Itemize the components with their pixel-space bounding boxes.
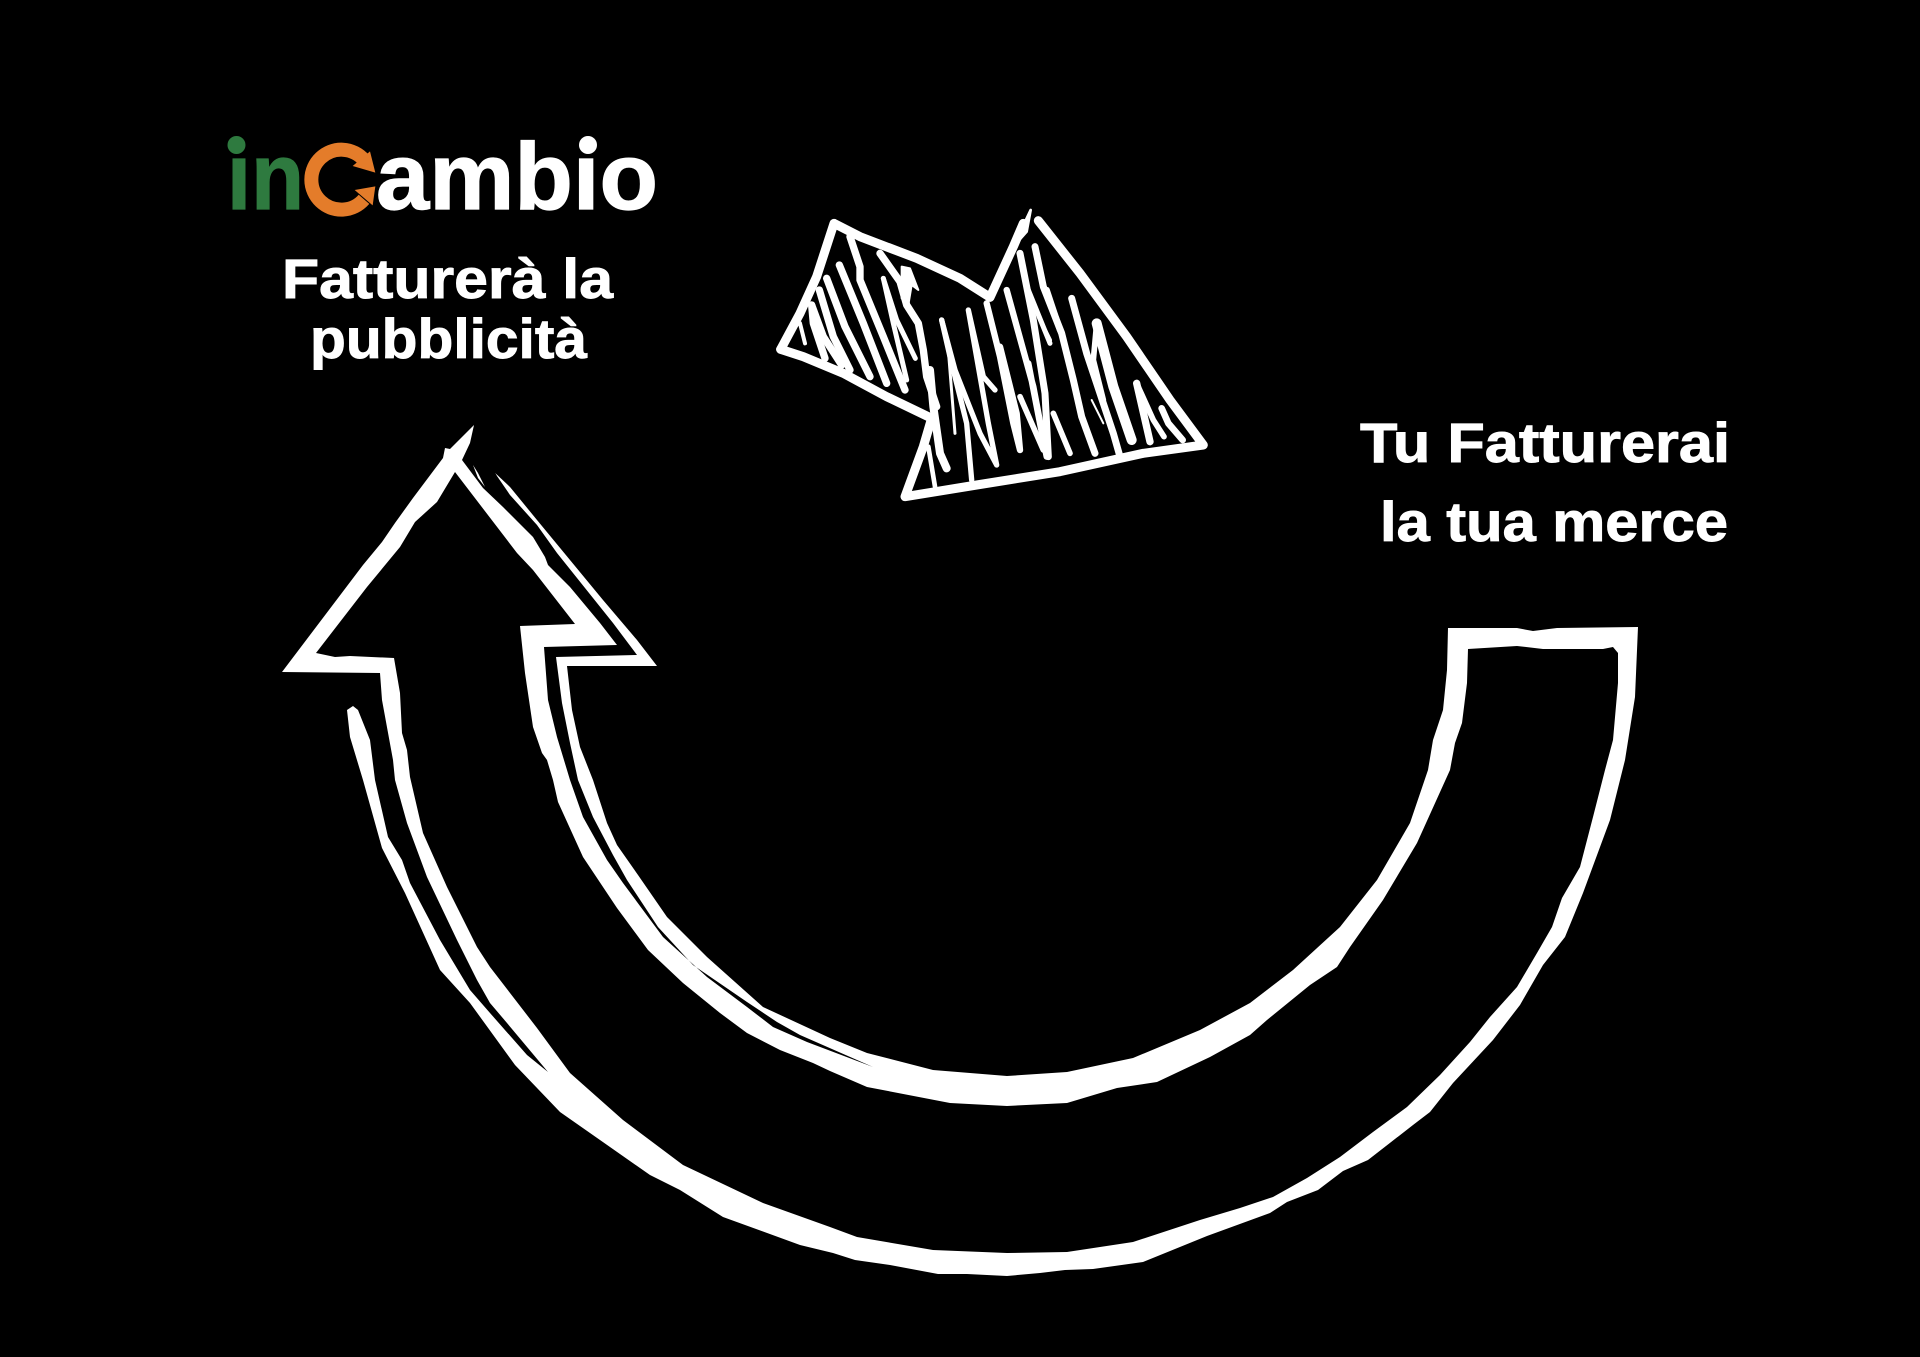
heading: Fatturerà la pubblicità: Fatturerà la [282, 247, 614, 310]
arrow black interior [316, 472, 1618, 1253]
icon: orange circular arrows letter C [311, 150, 375, 210]
hatching: left section [800, 237, 937, 407]
arrow inner slit [462, 460, 873, 1067]
heading: Fatturerà la pubblicità [282, 247, 614, 370]
logo word part: in: in [227, 124, 304, 230]
arrow head sliver [473, 465, 485, 487]
icon: scribbled arrow pointing right-down [781, 210, 1203, 497]
heading: Tu Fatturerai la tua merce: Tu Fatturerai [1360, 411, 1730, 474]
big curved arrow [282, 425, 1638, 1276]
arrow white silhouette [282, 425, 1638, 1276]
hatching: right section [1020, 247, 1183, 457]
logo word part: ambio: ambio [376, 124, 658, 230]
heading: Tu Fatturerai la tua merce [1360, 411, 1730, 553]
hatching: central section [928, 290, 1060, 487]
heading: Fatturerà la pubblicità: pubblicità [310, 307, 588, 370]
heading: Tu Fatturerai la tua merce: la tua merce [1380, 490, 1728, 553]
arrow outline [781, 210, 1203, 497]
logo: inCambio [224, 124, 658, 230]
